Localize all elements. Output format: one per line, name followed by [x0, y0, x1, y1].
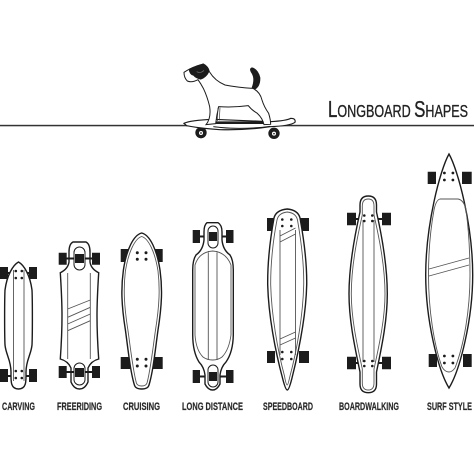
board: freeriding [59, 242, 100, 389]
board: cruising [121, 233, 163, 389]
label: freeriding: FREERIDING [57, 401, 102, 413]
illustration: dog on skateboard [184, 64, 295, 139]
ground line [0, 125, 474, 126]
label: cruising: CRUISING [123, 401, 160, 413]
label: long distance: LONG DISTANCE [182, 401, 243, 413]
label: boardwalking: BOARDWALKING [339, 401, 399, 413]
board: boardwalking [347, 196, 391, 393]
board: speedboard [267, 209, 309, 390]
board: surf style [426, 154, 473, 388]
board: long distance [193, 223, 234, 390]
label: speedboard: SPEEDBOARD [263, 401, 313, 413]
label: carving: CARVING [2, 401, 35, 413]
board: carving [0, 262, 37, 389]
